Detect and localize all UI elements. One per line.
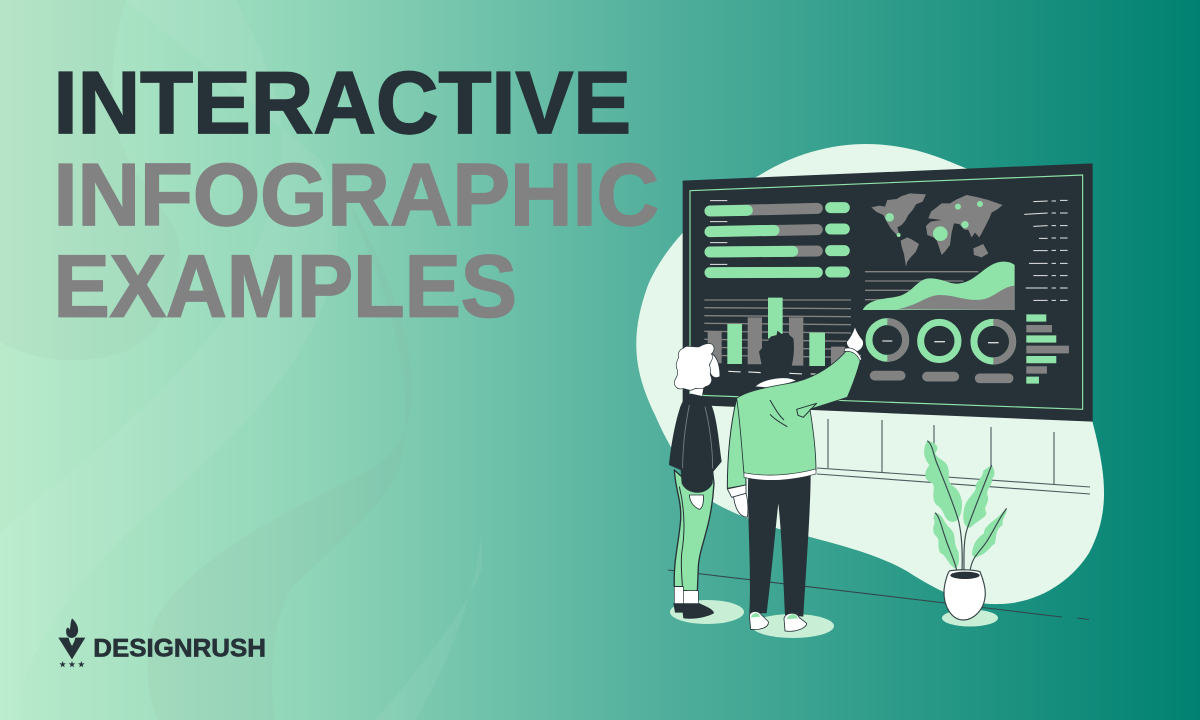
man	[727, 327, 863, 631]
title line: interactive: INTERACTIVE	[54, 53, 631, 152]
title	[54, 53, 659, 335]
woman trousers	[674, 470, 714, 592]
man left arm	[727, 398, 746, 488]
pot soil	[950, 572, 980, 579]
trouser side seam	[679, 487, 684, 588]
woman face	[709, 353, 720, 378]
woman socks	[674, 587, 698, 609]
wall rail and posts	[817, 419, 1090, 494]
title line: infographic: INFOGRAPHIC	[54, 145, 659, 244]
sweater seams	[683, 405, 713, 468]
man pointing hand	[847, 327, 863, 352]
woman shoes	[673, 603, 714, 619]
plant leaves	[924, 441, 1007, 568]
floor line	[668, 570, 1089, 620]
board panel	[683, 163, 1093, 422]
woman hand	[689, 495, 703, 509]
background waves	[0, 0, 482, 720]
woman collar	[690, 388, 703, 396]
icon: flame and v mark	[58, 618, 85, 667]
shadow ellipses	[670, 600, 998, 638]
man shoes	[749, 611, 807, 631]
people	[669, 327, 863, 631]
bar chart	[704, 298, 851, 374]
logo: designrush	[58, 618, 266, 667]
man trousers	[748, 475, 811, 617]
woman	[669, 344, 722, 619]
board inner border	[690, 175, 1083, 409]
woman sweater	[669, 394, 722, 493]
donut charts	[869, 322, 1013, 378]
man left cuff	[727, 485, 746, 497]
jacket hem	[744, 469, 816, 480]
man collar	[755, 378, 797, 388]
logo wordmark: DESIGNRUSH	[93, 636, 266, 663]
horizontal bar chart	[1026, 314, 1069, 384]
area chart	[863, 262, 1015, 310]
label ticks	[1024, 200, 1068, 300]
progress bars	[710, 201, 844, 273]
woman hair	[674, 344, 714, 390]
background blob	[636, 144, 1104, 604]
plant	[924, 441, 1007, 620]
plant pot	[944, 570, 985, 620]
plant stems	[927, 441, 1007, 572]
dashboard board	[683, 163, 1093, 422]
man jacket	[737, 348, 862, 477]
man head	[759, 331, 794, 378]
title line: examples: EXAMPLES	[54, 236, 517, 335]
man hand	[733, 493, 748, 517]
jacket creases and underarm fold	[770, 400, 817, 427]
world map	[871, 193, 1003, 267]
man right cuff	[844, 348, 862, 361]
